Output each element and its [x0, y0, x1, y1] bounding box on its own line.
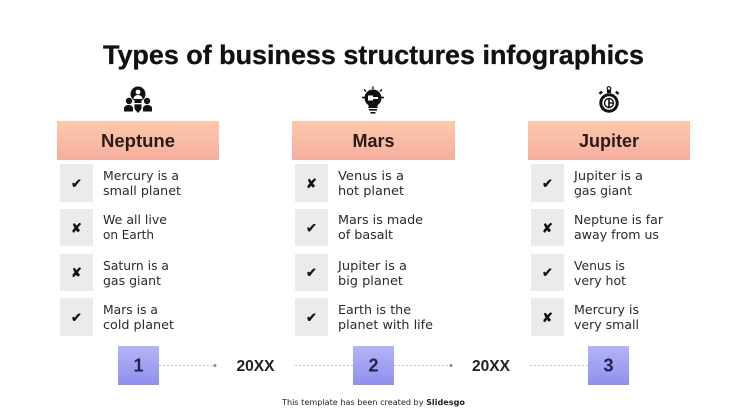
row: Earth: on Earth [103, 227, 154, 242]
row: Mercury [60, 164, 181, 202]
row: Mars basalt: ✔ [306, 222, 317, 236]
row: Mars: cold planet [103, 317, 174, 332]
row: Neptune far [531, 209, 664, 246]
row: Mercury small: very small [574, 317, 639, 332]
row: Earth life [295, 298, 433, 336]
year 2: 20XX [472, 358, 511, 375]
step 3 [588, 346, 629, 385]
row: Venus: hot planet [338, 183, 404, 198]
step 3: 3 [603, 356, 614, 376]
row: Jupiter giant: ✔ [542, 177, 553, 192]
step 1 [118, 346, 159, 385]
icon: stopwatch [599, 87, 619, 111]
row: Mars basalt [295, 209, 423, 246]
row: Venus hot: very hot [574, 273, 626, 288]
row: Jupiter giant [531, 164, 643, 202]
row: Mars basalt: of basalt [338, 227, 393, 242]
row: Jupiter giant: Jupiter is a [573, 168, 643, 183]
icon: people [124, 86, 152, 113]
row: Earth [60, 209, 167, 246]
step 2 [353, 346, 394, 385]
timeline [118, 346, 629, 385]
panel: Jupiter [528, 121, 690, 336]
row: Jupiter: big planet [338, 273, 403, 288]
row: Earth: ✘ [71, 222, 82, 236]
panel: Mars [292, 121, 455, 336]
heading: Neptune: Neptune [101, 131, 175, 151]
heading: Mars [292, 121, 455, 160]
row: Neptune far: Neptune is far [574, 212, 664, 227]
row: Jupiter [295, 254, 407, 291]
footer credit: This template has been created by Slidesgo [281, 398, 466, 407]
row: Earth: We all live [103, 212, 167, 227]
row: Mars basalt: Mars is made [338, 212, 423, 227]
row: Saturn: gas giant [103, 273, 161, 288]
row: Saturn [60, 254, 169, 291]
row: Jupiter: ✔ [306, 266, 317, 281]
heading: Neptune [57, 121, 219, 160]
row: Mars: Mars is a [103, 302, 158, 317]
row: Earth life: Earth is the [338, 302, 411, 317]
row: Mercury: Mercury is a [103, 168, 179, 183]
row: Venus hot: Venus is [574, 258, 625, 273]
row: Earth life: planet with life [338, 317, 433, 332]
year 1: 20XX [236, 358, 275, 375]
row: Mercury small [531, 298, 639, 336]
row: Venus: Venus is a [338, 168, 404, 183]
row: Venus [295, 164, 404, 202]
row: Venus hot: ✔ [542, 266, 553, 281]
heading: Jupiter: Jupiter [579, 131, 639, 151]
row: Earth life: ✔ [306, 311, 317, 326]
row: Mercury: ✔ [71, 177, 82, 192]
row: Saturn: Saturn is a [103, 258, 169, 273]
row: Mercury small: Mercury is [574, 302, 639, 317]
row: Mercury: small planet [103, 183, 181, 198]
row: Saturn: ✘ [71, 266, 82, 281]
row: Neptune far: away from us [574, 227, 659, 242]
row: Jupiter: Jupiter is a [337, 258, 407, 273]
row: Mercury small: ✘ [542, 311, 553, 326]
row: Venus hot [531, 254, 626, 291]
icon: light bulb [362, 86, 384, 114]
heading: Mars: Mars [352, 131, 394, 151]
step 1: 1 [133, 356, 144, 376]
row: Mars: ✔ [71, 311, 82, 326]
panel: Neptune [57, 121, 219, 336]
step 2: 2 [368, 356, 379, 376]
row: Jupiter giant: gas giant [574, 183, 632, 198]
row: Mars [60, 298, 174, 336]
heading: Jupiter [528, 121, 690, 160]
row: Neptune far: ✘ [542, 222, 553, 236]
title: Types of business structures infographics [103, 40, 644, 70]
row: Venus: ✘ [306, 177, 317, 192]
